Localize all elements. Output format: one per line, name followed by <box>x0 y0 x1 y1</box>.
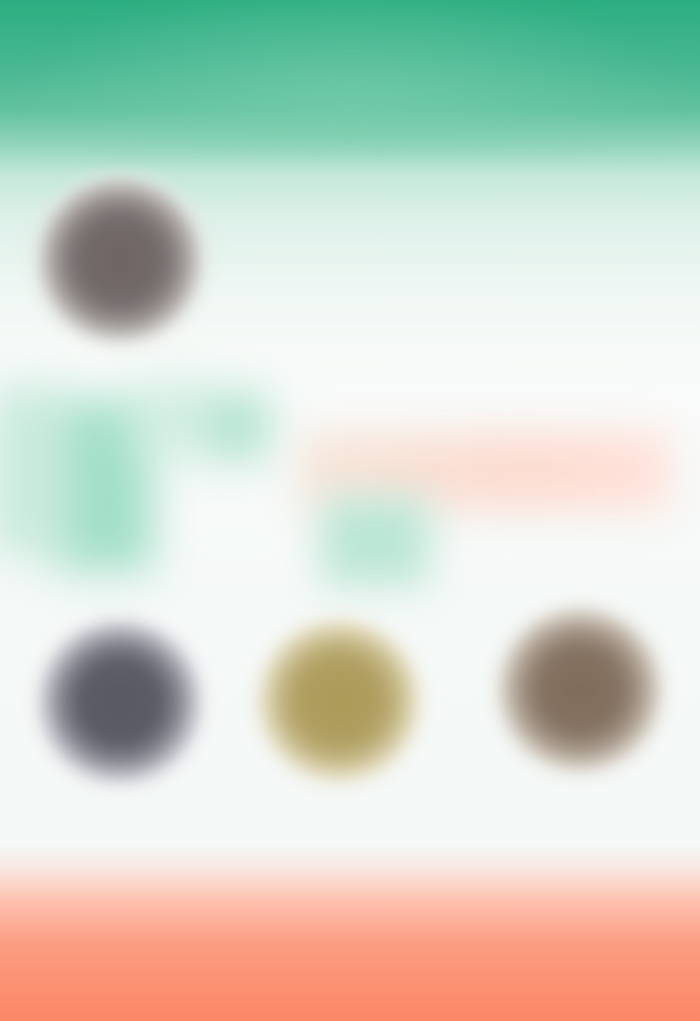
icon: brown circle <box>486 596 674 784</box>
panel: teal bars left <box>0 362 292 598</box>
block: small teal block <box>190 393 268 459</box>
block: connecting tint <box>130 380 210 460</box>
icon: dark grey circle <box>26 608 214 796</box>
callout: teal block below banner <box>322 498 428 584</box>
header band <box>0 0 700 150</box>
callout: salmon banner <box>300 432 670 510</box>
icon: top brown circle <box>26 166 214 354</box>
icon: gold circle <box>246 608 432 794</box>
block: side teal block <box>0 385 70 555</box>
bar: main teal block <box>52 400 152 570</box>
